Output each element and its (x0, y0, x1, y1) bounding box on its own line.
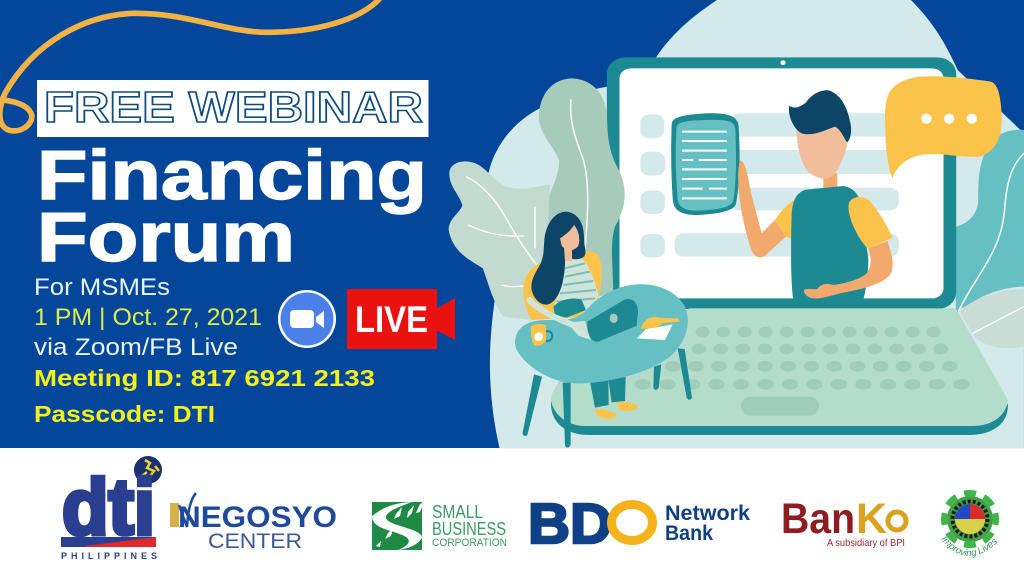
title (37, 136, 427, 276)
woman at table (515, 212, 692, 447)
logo: Negosyo Center: CENTER (208, 530, 302, 553)
left leaf (449, 161, 550, 320)
logo: Negosyo Center: NEGOSYO (178, 501, 337, 534)
event details: 1 PM | Oct. 27, 2021 (34, 304, 262, 331)
badge: free webinar: FREE WEBINAR (44, 83, 423, 132)
icon: zoom (278, 290, 336, 348)
logo: DTI Philippines: PHILIPPINES (61, 551, 157, 561)
background blob (488, 0, 1024, 448)
chair (523, 251, 602, 320)
logo: BanKo: A subsidiary of BPI (827, 537, 905, 549)
logo: Small Business Corporation: SMALL (432, 502, 483, 522)
logo: BanKo (781, 495, 906, 549)
decorative yellow rope (0, 0, 380, 131)
logo: BanKo: Ban (781, 495, 855, 543)
hair (531, 212, 585, 305)
event details (34, 274, 262, 361)
event details: via Zoom/FB Live (34, 334, 238, 361)
illustration (449, 0, 1024, 448)
notebook (637, 317, 680, 340)
meeting credentials: Passcode: DTI (34, 401, 215, 427)
icon: live camera (347, 289, 455, 349)
illustration middle layers (449, 76, 1008, 435)
table top (515, 284, 688, 383)
title: Financing (37, 136, 427, 214)
white logo strip (0, 448, 1024, 576)
keyboard under hand (567, 321, 591, 340)
lap (553, 299, 586, 318)
presenter (738, 90, 893, 300)
logo: Small Business Corporation: BUSINESS (432, 519, 506, 539)
logo: Improving Lives seal: Improving Lives (941, 536, 997, 558)
mini laptop (587, 299, 638, 342)
meeting credentials (34, 365, 375, 427)
neck and face (560, 225, 579, 261)
laptop keyboard base (551, 308, 1008, 435)
laptop screen (607, 57, 956, 309)
right plant (956, 130, 1024, 348)
blue banner background (0, 0, 1024, 448)
illustration background layers (488, 0, 1024, 448)
logo: BanKo: K (856, 495, 887, 543)
logo: BDO Network Bank (528, 492, 750, 556)
table legs (523, 348, 692, 447)
icon: live camera: LIVE (355, 299, 428, 340)
logo: BDO Network Bank: Bank (665, 522, 713, 545)
legs (590, 377, 626, 408)
logo: DTI Philippines: dti (62, 462, 155, 551)
logo: Small Business Corporation: CORPORATION (432, 537, 507, 549)
logo: BDO Network Bank: BD (528, 492, 612, 556)
logo: BDO Network Bank: Network (665, 502, 750, 525)
logo: Small Business Corporation (372, 502, 507, 550)
shoes (595, 402, 638, 419)
tall plant (539, 78, 625, 300)
logo: Improving Lives seal (941, 490, 999, 558)
mug (531, 324, 552, 346)
event details: For MSMEs (34, 274, 170, 301)
speech bubble (885, 76, 1002, 178)
torso (553, 258, 598, 312)
arm and hand (529, 300, 582, 328)
meeting credentials: Meeting ID: 817 6921 2133 (34, 365, 375, 391)
document held by presenter (671, 113, 740, 215)
logo: Negosyo Center (170, 493, 337, 553)
title: Forum (37, 198, 295, 276)
